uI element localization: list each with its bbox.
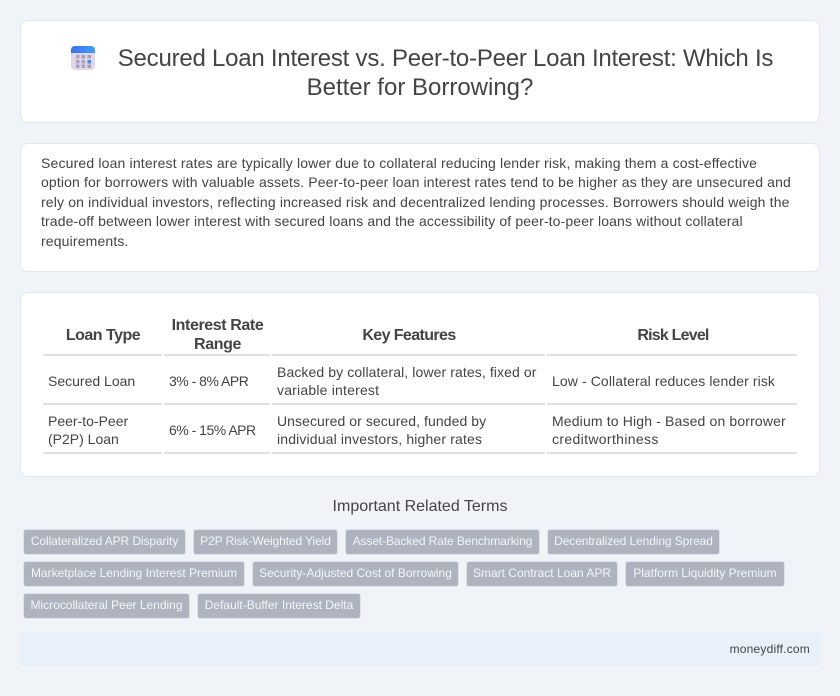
header: interest rate range: [172, 317, 264, 353]
table: [43, 317, 797, 454]
tag: P2P Risk-Weighted Yield: [200, 534, 331, 548]
tag: Platform Liquidity Premium: [633, 566, 777, 580]
row: secured loan: Secured Loan: [48, 373, 135, 389]
footer source text: moneydiff.com: [730, 642, 810, 656]
description text: Secured loan interest rates are typically lower due to collateral reducing lender risk, making them a cost-effective: [41, 155, 757, 171]
description text: requirements.: [41, 233, 129, 249]
tag: Marketplace Lending Interest Premium: [31, 566, 237, 580]
description text: trade-off between lower interest with secured loans and the accessibility of peer-to-peer loans without collateral: [41, 213, 743, 229]
tag: Microcollateral Peer Lending: [30, 598, 183, 612]
tag: Asset-Backed Rate Benchmarking: [353, 534, 532, 548]
header: key features: Key Features: [362, 327, 456, 344]
header: interest rate range: Interest Rate: [172, 317, 263, 334]
tag: Security-Adjusted Cost of Borrowing: [259, 566, 452, 580]
tag: [193, 529, 338, 554]
header: loan type: Loan Type: [66, 327, 140, 344]
related term tags: [23, 529, 785, 619]
tag: Collateralized APR Disparity: [31, 534, 178, 548]
description text: option for borrowers with valuable assets. Peer-to-peer loan interest rates tend to be higher as they are unsecured and: [41, 174, 791, 190]
tag: Decentralized Lending Spread: [554, 534, 713, 548]
table: Backed by collateral, lower rates, fixed or: [277, 364, 537, 380]
panel: description: [20, 143, 820, 272]
title: Secured Loan Interest vs. Peer-to-Peer Loan Interest: Which Is: [118, 45, 773, 72]
tag: Default-Buffer Interest Delta: [205, 598, 353, 612]
row: peer-to-peer loan: [48, 413, 128, 447]
header: risk level: Risk Level: [637, 327, 709, 344]
row: peer-to-peer loan: Peer-to-Peer: [48, 413, 128, 429]
description text: rely on individual investors, reflecting increased risk and decentralized lending processes. Borrowers should weigh the: [41, 194, 790, 210]
table: Low - Collateral reduces lender risk: [552, 373, 775, 389]
table: creditworthiness: [552, 431, 659, 447]
tag: [345, 529, 540, 554]
table: variable interest: [277, 382, 379, 398]
tag: [23, 561, 245, 586]
footer bar: [20, 632, 820, 666]
tag: [547, 529, 720, 554]
icon: calendar: [71, 46, 95, 70]
tag: [466, 561, 618, 586]
tag: [23, 529, 186, 554]
tag: [23, 593, 190, 618]
title: [118, 45, 773, 101]
table: individual investors, higher rates: [277, 431, 482, 447]
tag: Smart Contract Loan APR: [473, 566, 611, 580]
panel: comparison table: [20, 292, 820, 477]
tag: [252, 561, 459, 586]
table: Unsecured or secured, funded by: [277, 413, 486, 429]
tag: [625, 561, 785, 586]
table: 6% - 15% APR: [169, 422, 256, 438]
description text: [41, 155, 791, 249]
related terms heading: Important Related Terms: [333, 498, 507, 515]
row: peer-to-peer loan: (P2P) Loan: [48, 431, 119, 447]
header: interest rate range: Range: [194, 336, 241, 353]
header panel: [20, 20, 820, 123]
table: 3% - 8% APR: [169, 373, 248, 389]
tag: [197, 593, 361, 618]
table: Medium to High - Based on borrower: [552, 413, 786, 429]
title: Better for Borrowing?: [307, 74, 533, 101]
